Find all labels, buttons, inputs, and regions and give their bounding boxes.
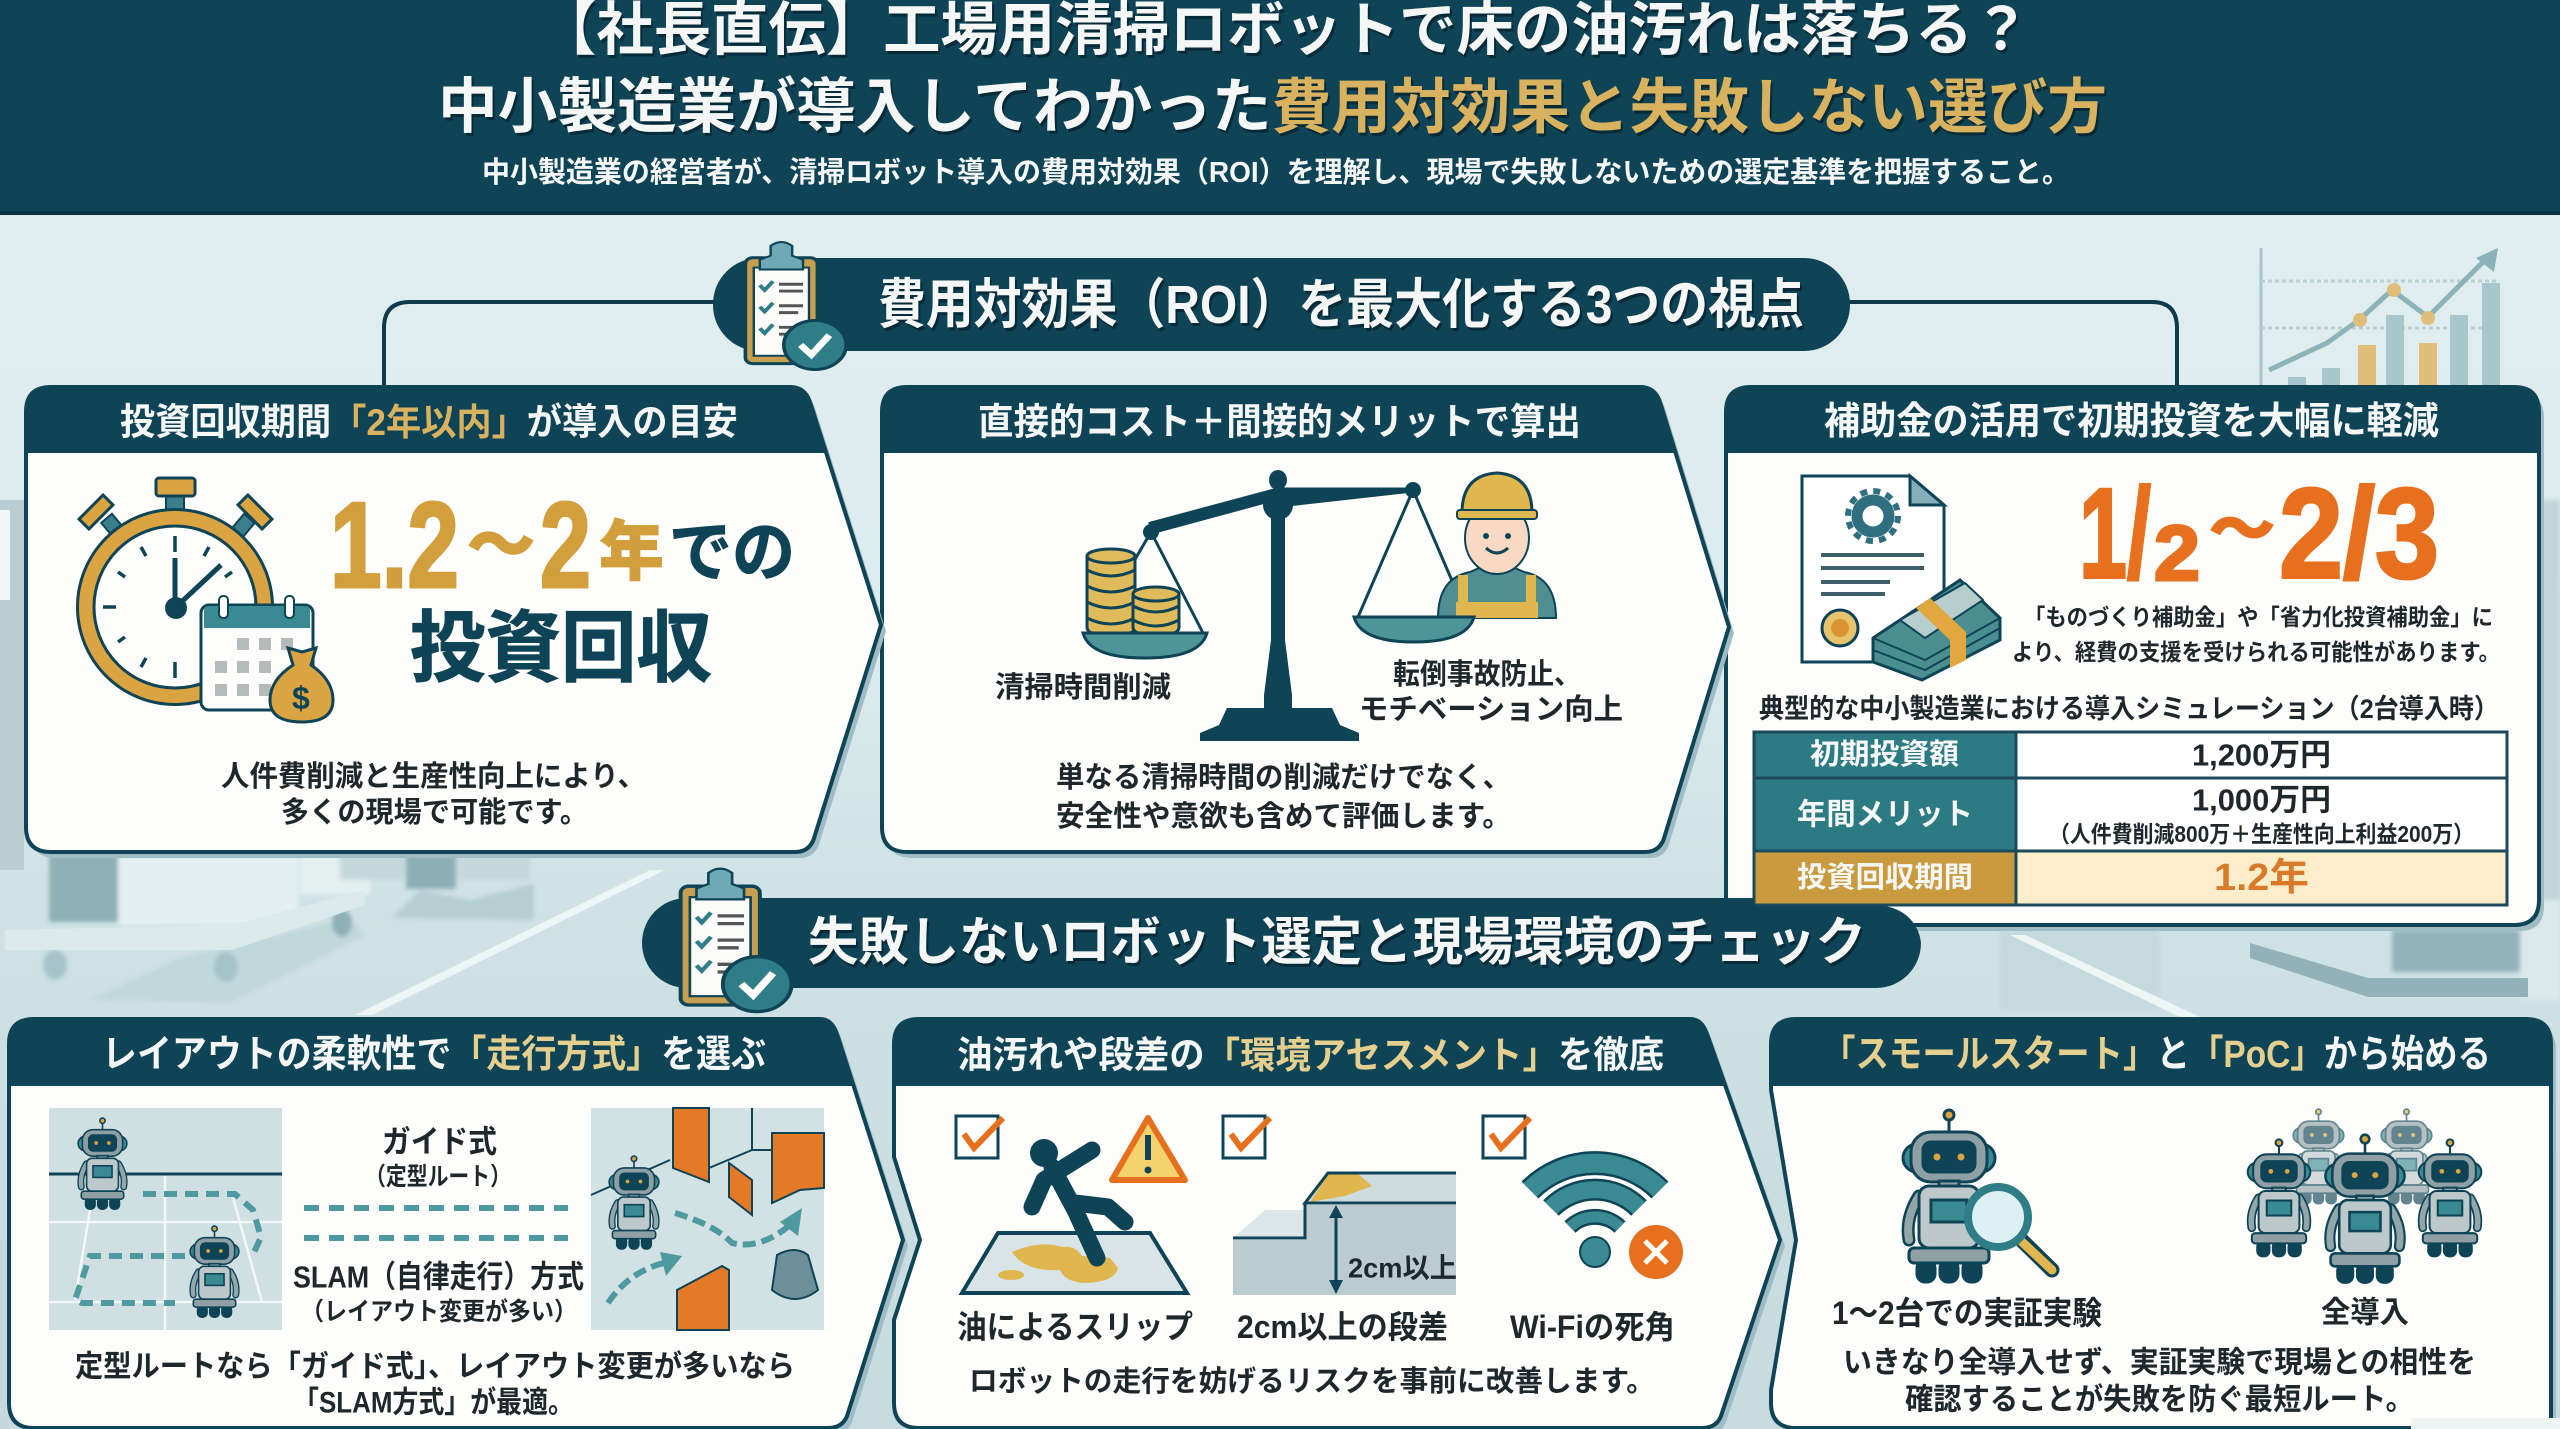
big number: subsidy rate: 〜: [2210, 496, 2274, 564]
simulation table: [1754, 732, 2507, 905]
section heading: ROI: [713, 242, 1850, 369]
icon: stopwatch, calendar, money bag: $: [292, 680, 310, 716]
illustration: SLAM route: [591, 1108, 824, 1330]
scale labels: [995, 658, 1623, 726]
description: 安全性や意欲も含めて評価します。: [1056, 800, 1511, 833]
simulation table: 1,200万円: [2192, 738, 2331, 772]
scale strings: [1092, 490, 1456, 633]
big number: payback years: での: [669, 515, 795, 589]
panel heading: レイアウトの柔軟性で「走行方式」を選ぶ: [102, 1034, 766, 1076]
method labels: （レイアウト変更が多い）: [301, 1297, 577, 1326]
panel heading: 「スモールスタート」と「PoC」から始める: [1822, 1034, 2491, 1076]
simulation table: （人件費削減800万＋生産性向上利益200万）: [2049, 821, 2474, 847]
heading text: 失敗しないロボット選定と現場環境のチェック: [808, 914, 1866, 972]
description: 確認することが失敗を防ぐ最短ルート。: [1905, 1382, 2414, 1416]
icon: document and banknotes: [1802, 476, 2000, 680]
icon: slip hazard: [956, 1116, 1187, 1293]
icon: robot with magnifier: [1903, 1110, 2052, 1282]
big number: payback years: 2: [540, 477, 591, 613]
icon: stopwatch, calendar, money bag: [76, 478, 333, 722]
subsidy description: 「ものづくり補助金」や「省力化投資補助金」に: [2024, 604, 2493, 630]
robot labels: [1832, 1295, 2409, 1331]
method labels: SLAM（自律走行）方式: [293, 1260, 584, 1294]
simulation table: 初期投資額: [1810, 738, 1959, 771]
icon: wifi dead zone: [1483, 1116, 1683, 1279]
simulation table: 1,000万円: [2192, 782, 2331, 818]
robot labels: 1〜2台での実証実験: [1832, 1295, 2102, 1331]
description: [1843, 1346, 2476, 1416]
icon: worker: [1438, 473, 1556, 618]
icon: robot fleet: [2248, 1109, 2481, 1283]
big number: subsidy rate: [2079, 462, 2439, 606]
description: 人件費削減と生産性向上により、: [221, 760, 646, 793]
simulation caption: 典型的な中小製造業における導入シミュレーション（2台導入時）: [1759, 694, 2499, 724]
scale labels: モチベーション向上: [1359, 693, 1623, 726]
robot labels: 全導入: [2321, 1296, 2409, 1330]
risk labels: 2cm以上の段差: [1237, 1309, 1448, 1345]
panel: travel method: [0, 1012, 920, 1429]
connector from section heading to panels: [384, 302, 2177, 388]
description: [1056, 761, 1511, 833]
description: 単なる清掃時間の削減だけでなく、: [1056, 761, 1511, 794]
description: 「SLAM方式」が最適。: [293, 1386, 574, 1420]
description: 定型ルートなら「ガイド式」、レイアウト変更が多いなら: [75, 1350, 795, 1384]
description: [75, 1350, 795, 1420]
big text: investment recovery: 投資回収: [410, 604, 712, 692]
simulation table: 投資回収期間: [1797, 861, 1973, 894]
description: [221, 760, 646, 829]
simulation table: 年間メリット: [1797, 798, 1973, 832]
panel heading: 補助金の活用で初期投資を大幅に軽減: [1824, 401, 2439, 443]
icon: balance scale: [1083, 470, 1474, 741]
big number: payback years: 〜: [468, 508, 534, 582]
subtitle: 中小製造業の経営者が、清掃ロボット導入の費用対効果（ROI）を理解し、現場で失敗しないための選定基準を把握すること。: [482, 155, 2070, 189]
section heading: robot selection: [642, 869, 1921, 1012]
risk labels: 油によるスリップ: [957, 1309, 1193, 1345]
subsidy description: [2012, 604, 2500, 665]
scale labels: 転倒事故防止、: [1393, 658, 1581, 691]
big number: subsidy rate: 2/3: [2279, 462, 2439, 606]
description: いきなり全導入せず、実証実験で現場との相性を: [1843, 1346, 2476, 1380]
big number: payback years: 年: [600, 516, 663, 588]
decorative growth chart: [2261, 248, 2500, 389]
description: ロボットの走行を妨げるリスクを事前に改善します。: [969, 1365, 1655, 1398]
illustration: guided route: [49, 1108, 282, 1330]
heading text: 費用対効果（ROI）を最大化する3つの視点: [878, 275, 1804, 335]
title banner: [0, 0, 2560, 215]
icon: clipboard check: [681, 869, 792, 1012]
panel heading: 油汚れや段差の「環境アセスメント」を徹底: [957, 1034, 1664, 1076]
icon: floor step: 2cm以上: [1348, 1252, 1457, 1284]
big number: subsidy rate: 2: [2154, 509, 2200, 597]
subsidy description: より、経費の支援を受けられる可能性があります。: [2012, 639, 2500, 665]
method labels: [293, 1124, 584, 1326]
title line 2: 中小製造業が導入してわかった費用対効果と失敗しない選び方: [438, 74, 2107, 140]
icon: floor step: [1223, 1116, 1457, 1295]
icon: clipboard check: [745, 242, 846, 369]
panel heading: 直接的コスト＋間接的メリットで算出: [978, 402, 1581, 442]
panel: direct and indirect merit: [875, 380, 1755, 858]
simulation table: 1.2年: [2214, 857, 2309, 899]
big number: subsidy rate: 1/: [2079, 462, 2151, 606]
description: 多くの現場で可能です。: [281, 796, 588, 829]
risk labels: [957, 1309, 1675, 1345]
panel: small start and PoC: [1765, 1012, 2560, 1429]
big number: payback years: 1.2: [330, 477, 459, 613]
panel: payback period: [20, 380, 900, 858]
method labels: （定型ルート）: [365, 1163, 511, 1191]
panel: environment assessment: [885, 1012, 1795, 1429]
scale labels: 清掃時間削減: [995, 671, 1171, 704]
panel heading: 投資回収期間「2年以内」が導入の目安: [120, 402, 738, 442]
icon: coins: [1087, 549, 1179, 633]
panel: subsidy: [1720, 380, 2550, 931]
big number: payback years: [330, 477, 795, 613]
risk labels: Wi-Fiの死角: [1510, 1309, 1675, 1345]
method labels: ガイド式: [382, 1124, 497, 1160]
